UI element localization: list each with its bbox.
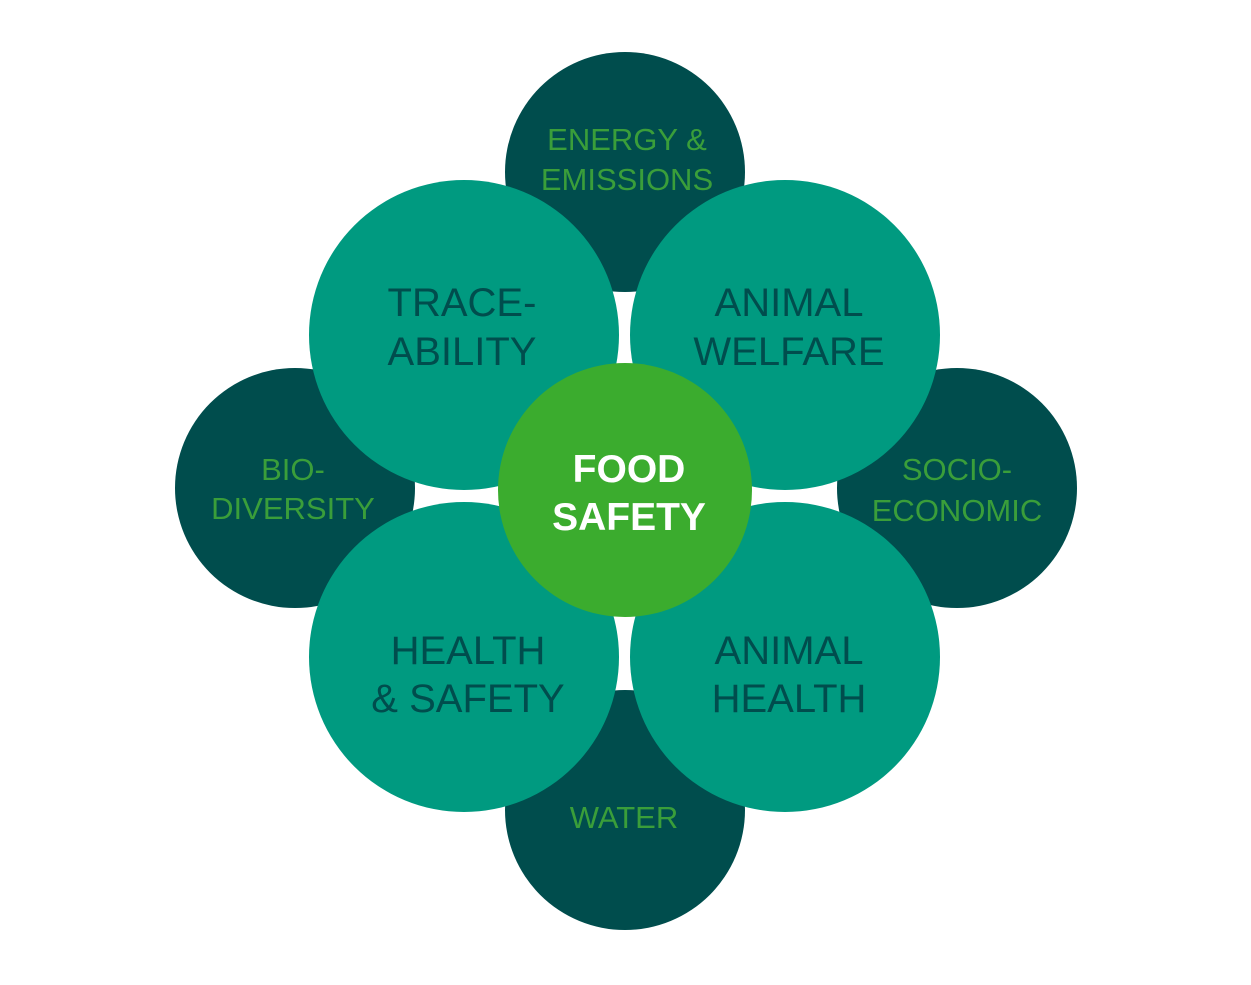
circle: animal health [630, 502, 940, 812]
circle: animal health: ANIMAL [715, 629, 863, 673]
circle: water: WATER [570, 800, 678, 835]
circle: health & safety [309, 502, 619, 812]
circle: energy & emissions [505, 52, 745, 292]
circle: animal welfare: ANIMAL [715, 281, 863, 325]
circle: water [505, 690, 745, 930]
circle: biodiversity: BIO- [261, 452, 325, 487]
circle: food safety: FOOD [573, 448, 685, 491]
circle: biodiversity [175, 368, 415, 608]
circle: biodiversity: DIVERSITY [211, 491, 375, 526]
circle: traceability: TRACE- [388, 281, 536, 325]
circle: animal welfare [630, 180, 940, 490]
circle: traceability: ABILITY [388, 330, 536, 374]
circle: health & safety: HEALTH [391, 629, 545, 673]
circle: energy & emissions: EMISSIONS [541, 162, 713, 197]
circle: animal welfare: WELFARE [693, 330, 885, 374]
circle: socio-economic [837, 368, 1077, 608]
circle: food safety: SAFETY [552, 496, 706, 539]
circle: health & safety: & SAFETY [371, 677, 565, 721]
circle: socio-economic: SOCIO- [902, 452, 1012, 487]
circle: energy & emissions: ENERGY & [547, 122, 707, 157]
circle: animal health: HEALTH [712, 677, 866, 721]
circle: socio-economic: ECONOMIC [872, 493, 1042, 528]
circle: traceability [309, 180, 619, 490]
circle: food safety [498, 363, 752, 617]
